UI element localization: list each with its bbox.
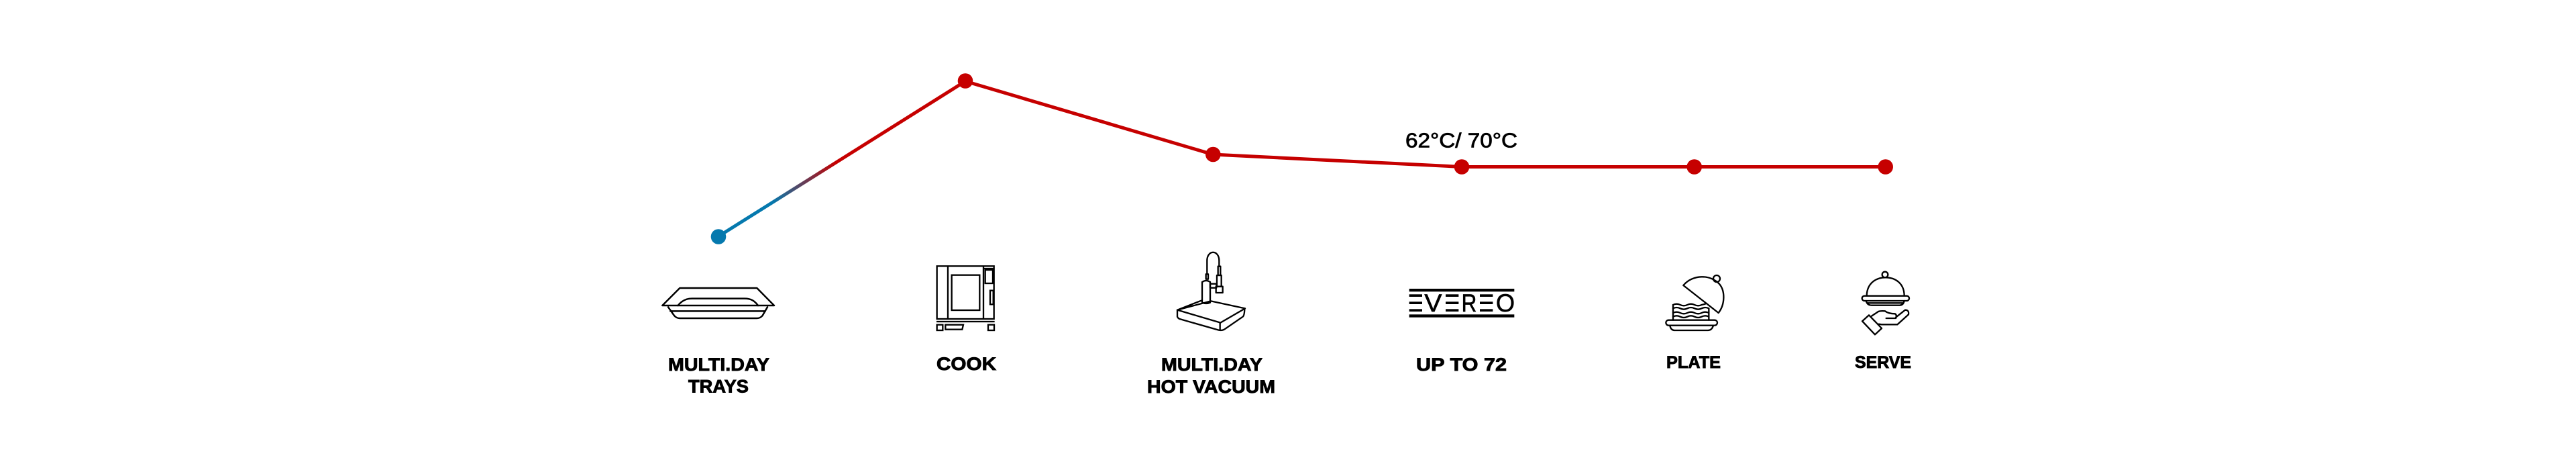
- point: evereo: [1454, 159, 1469, 175]
- icon: evereo logo: R: [1462, 289, 1477, 317]
- point: plate: [1686, 159, 1702, 175]
- icon: tray: [662, 288, 774, 318]
- label: multi.day trays: [668, 355, 769, 396]
- label: multi.day hot vacuum: HOT VACUUM: [1147, 377, 1275, 397]
- step: up to 72: [1409, 289, 1515, 375]
- label: cook: COOK: [936, 354, 997, 374]
- icon: vacuum sealer: [1177, 252, 1245, 330]
- temperature line chart: [711, 73, 1893, 244]
- icon: evereo logo: V: [1424, 289, 1442, 317]
- point: trays: [711, 229, 726, 244]
- step: cook: [936, 266, 997, 374]
- label: plate: PLATE: [1666, 353, 1721, 372]
- icon: hand holding cloche: [1862, 272, 1909, 334]
- label: up to 72: UP TO 72: [1416, 355, 1507, 375]
- label: multi.day trays: MULTI.DAY: [668, 355, 769, 375]
- label: multi.day trays: TRAYS: [688, 376, 749, 396]
- icon: plated lasagne with cloche: [1666, 275, 1723, 330]
- step: multi-day trays: [662, 288, 774, 396]
- icon: combi oven: [936, 266, 995, 330]
- step: plate: [1666, 275, 1723, 372]
- point: cook: [958, 73, 973, 89]
- label: multi.day hot vacuum: [1147, 355, 1275, 397]
- icon: evereo logo: [1409, 289, 1515, 318]
- temperature label: 62°C/ 70°C: [1405, 129, 1517, 152]
- icon: evereo logo: O: [1496, 289, 1515, 317]
- label: multi.day hot vacuum: MULTI.DAY: [1161, 355, 1263, 375]
- falling and holding line: [965, 81, 1886, 167]
- rising line segment: [718, 81, 965, 236]
- step: multi-day hot vacuum: [1147, 252, 1275, 397]
- step: serve: [1855, 272, 1911, 372]
- point: serve: [1878, 159, 1893, 175]
- label: serve: SERVE: [1855, 353, 1911, 372]
- point: hot vacuum: [1205, 147, 1221, 162]
